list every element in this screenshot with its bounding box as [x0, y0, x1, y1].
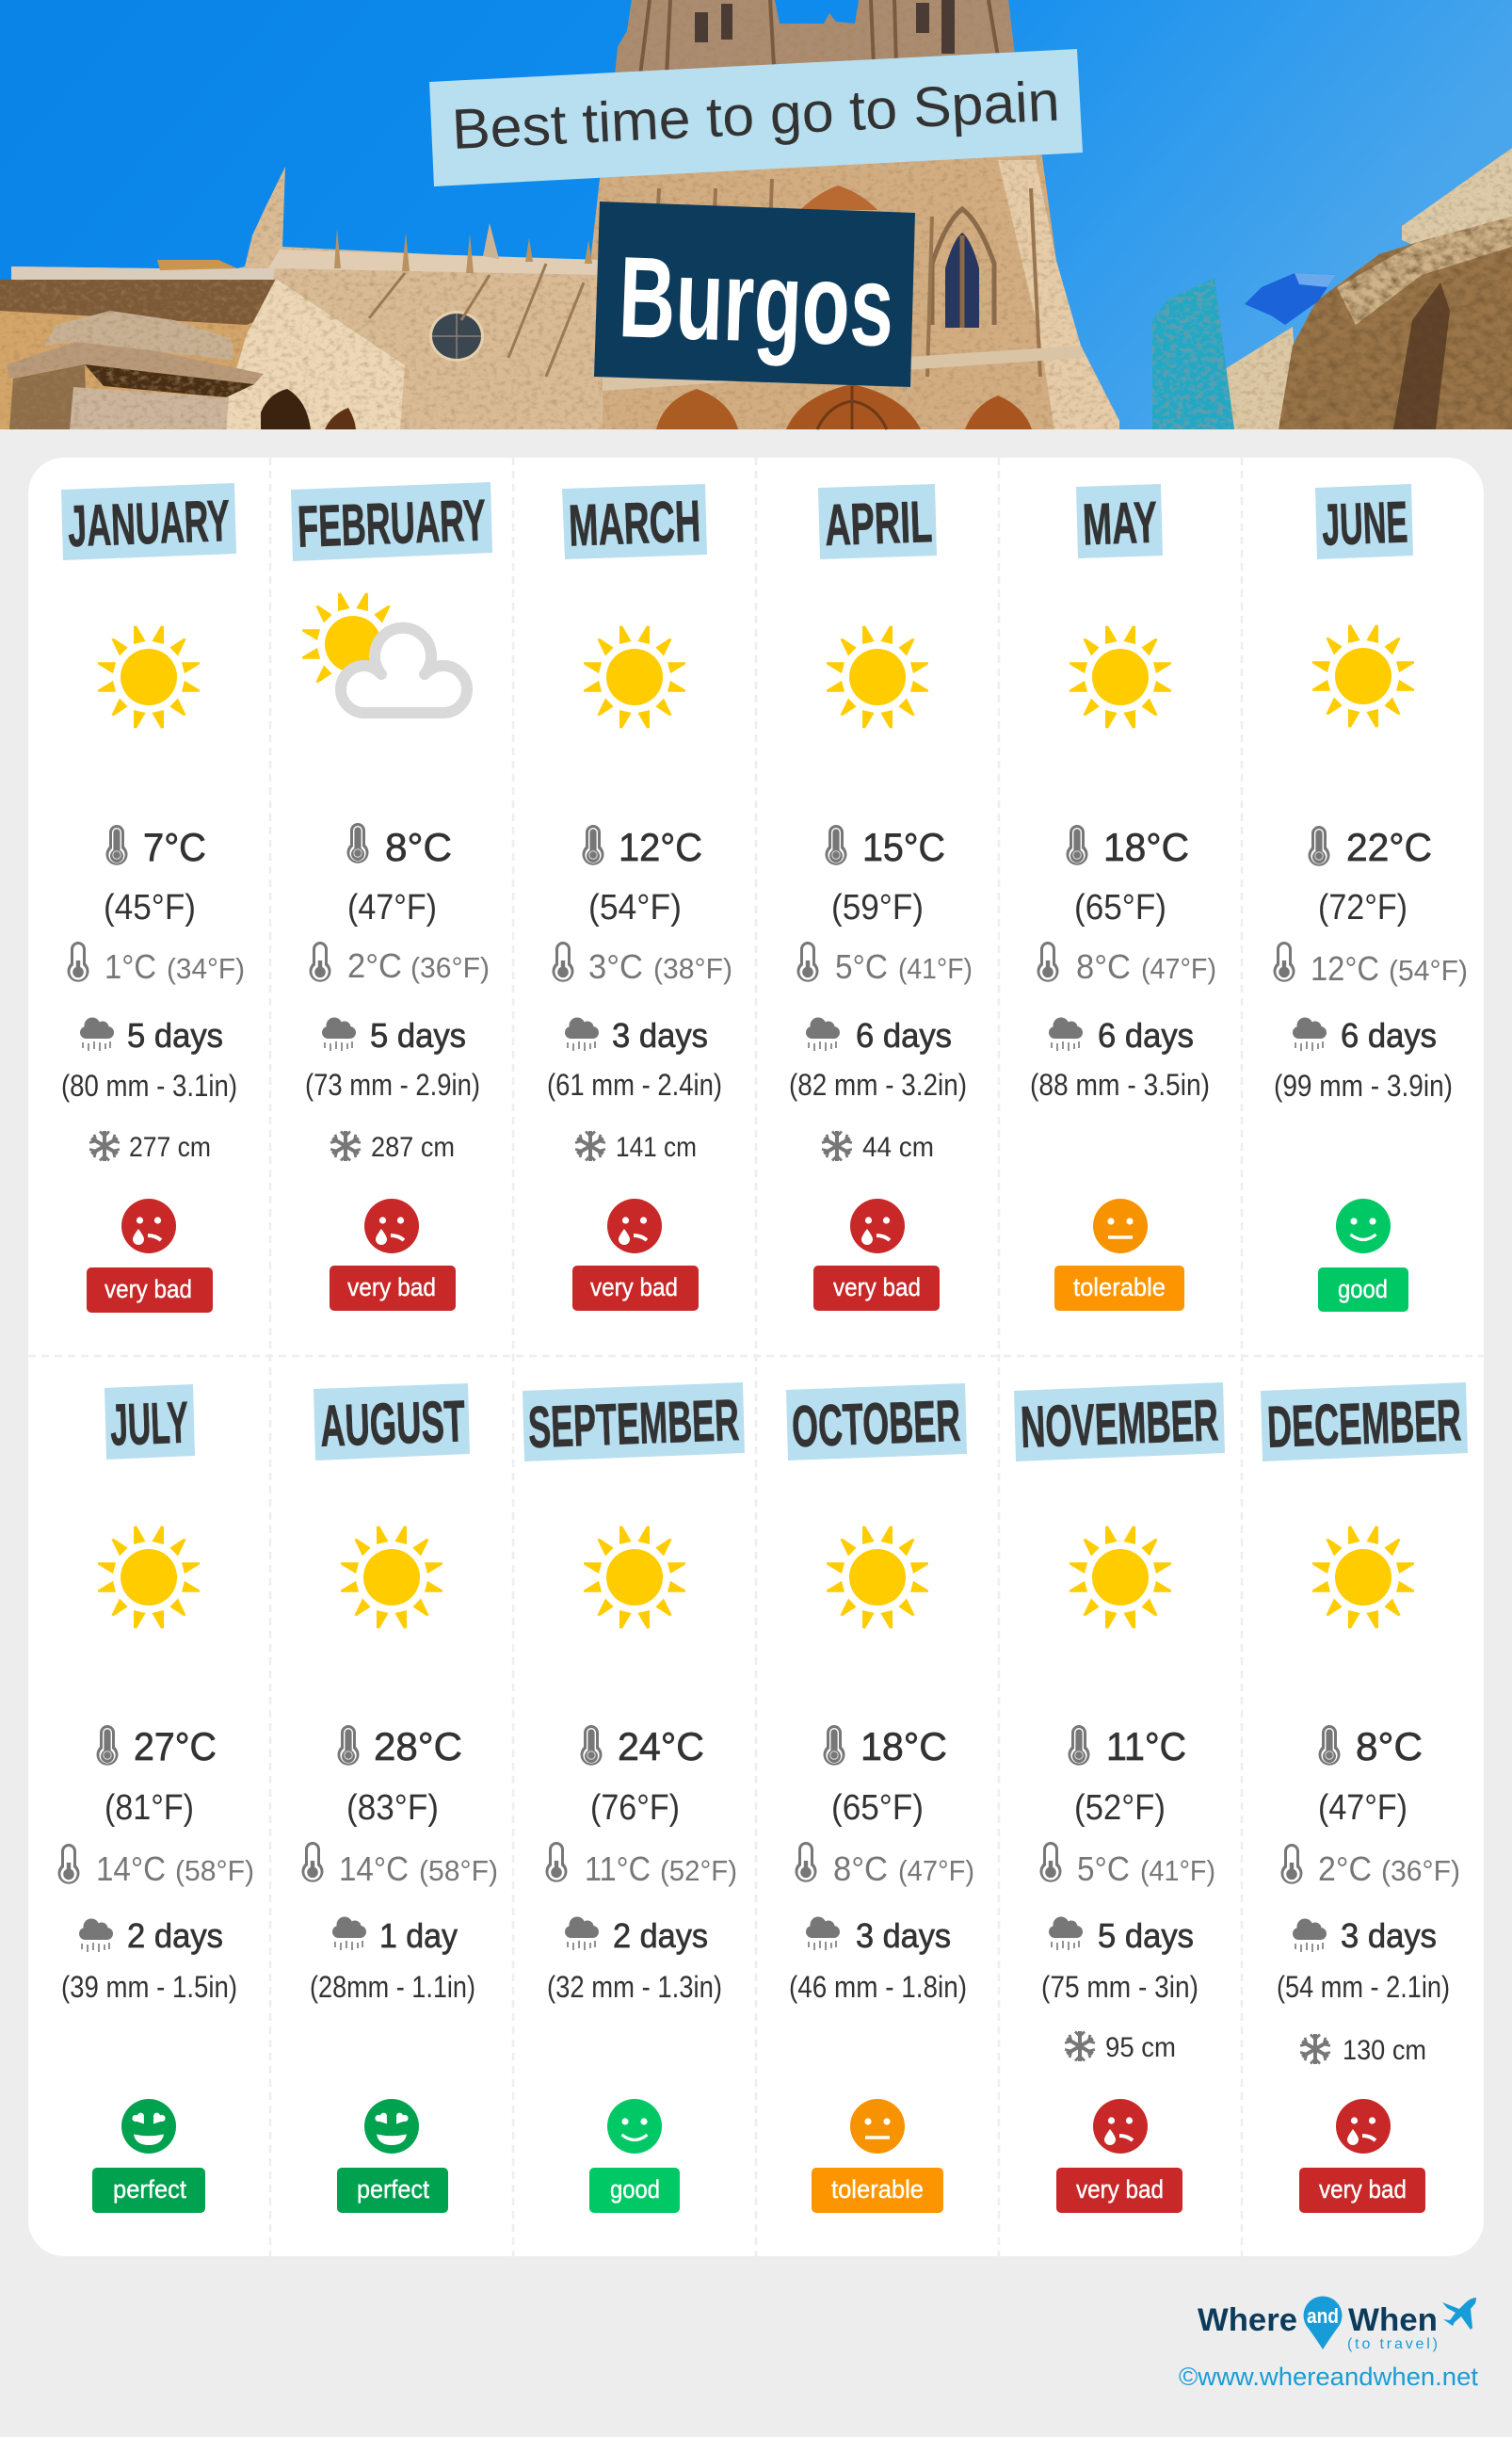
month label: APRIL [824, 490, 933, 558]
logo: Where and When: When [1348, 2302, 1438, 2338]
icon: rain cloud [565, 1017, 599, 1051]
rainy days: 2 days [613, 1916, 708, 1955]
low temperature F: (41°F) [1140, 1854, 1215, 1887]
high temperature C: 18°C [861, 1724, 947, 1768]
rainy days: 5 days [1098, 1916, 1194, 1955]
panel: October [786, 1383, 974, 2213]
rating pill [92, 2168, 205, 2213]
high temperature C: 15°C [862, 825, 945, 869]
icon: thermometer low [309, 942, 331, 982]
icon: rain cloud [1293, 1919, 1327, 1952]
icon: thermometer low [1273, 942, 1295, 982]
icon: sun [341, 1525, 442, 1629]
low temperature F: (52°F) [660, 1854, 737, 1887]
low temperature F: (34°F) [167, 952, 245, 985]
snowfall: 44 cm [862, 1132, 934, 1163]
rainy days: 6 days [856, 1016, 952, 1055]
low temperature F: (36°F) [410, 951, 490, 984]
rating pill [1299, 2168, 1425, 2213]
rating pill: tolerable [1073, 1273, 1166, 1301]
icon: snowflake [89, 1131, 120, 1161]
icon: snowflake [575, 1131, 605, 1161]
high temperature F: (47°F) [1318, 1788, 1407, 1828]
icon: rain cloud [322, 1017, 356, 1051]
low temperature C: 8°C [1076, 947, 1131, 986]
rating pill [1056, 2168, 1182, 2213]
rating pill [337, 2168, 448, 2213]
icon: sun behind cloud [302, 593, 467, 713]
header photo: Burgos cathedral [0, 0, 1512, 429]
rainy days: 5 days [127, 1016, 223, 1055]
high temperature F: (47°F) [347, 888, 437, 928]
high temperature C: 22°C [1346, 825, 1432, 869]
high temperature C: 11°C [1106, 1724, 1186, 1768]
rainy days: 6 days [1098, 1016, 1194, 1055]
logo: Where and When [1198, 2297, 1476, 2352]
month label: JUNE [1321, 490, 1408, 558]
icon: snowflake [1300, 2034, 1330, 2064]
low temperature F: (47°F) [1141, 952, 1216, 985]
rating pill: very bad [1319, 2175, 1407, 2203]
white card panel [28, 458, 1484, 2256]
low temperature C: 1°C [105, 947, 156, 986]
high temperature F: (72°F) [1318, 888, 1407, 928]
high temperature F: (52°F) [1074, 1788, 1166, 1828]
month label [1076, 484, 1163, 558]
month label: OCTOBER [791, 1389, 961, 1460]
rating pill: very bad [347, 1273, 436, 1301]
snowfall: 130 cm [1343, 2035, 1426, 2066]
icon: sun [98, 625, 200, 729]
high temperature C: 24°C [618, 1724, 704, 1768]
icon: neutral face [1093, 1199, 1148, 1253]
rating pill: tolerable [831, 2175, 924, 2203]
copyright url: ©www.whereandwhen.net [1179, 2363, 1478, 2391]
low temperature C: 5°C [835, 947, 888, 986]
low temperature F: (58°F) [175, 1854, 254, 1887]
month label [61, 483, 236, 560]
icon: thermometer low [795, 1842, 817, 1882]
icon: thermometer low [546, 1842, 567, 1882]
icon: thermometer high [96, 1725, 119, 1766]
low temperature F: (54°F) [1389, 954, 1468, 987]
panel: November [1014, 1382, 1225, 2213]
icon: map pin [1304, 2297, 1343, 2349]
month label: FEBRUARY [297, 488, 487, 560]
low temperature F: (36°F) [1381, 1854, 1460, 1887]
icon: sun [1312, 625, 1414, 727]
icon: thermometer high [823, 1725, 845, 1766]
icon: sun [1070, 1525, 1171, 1629]
month label: SEPTEMBER [527, 1388, 740, 1461]
low temperature F: (41°F) [898, 952, 973, 985]
month label: JULY [109, 1391, 189, 1459]
rating pill [589, 2168, 680, 2213]
icon: smiling face [607, 2099, 662, 2154]
low temperature C: 2°C [1318, 1849, 1372, 1888]
icon: smiling face [1336, 1199, 1391, 1253]
high temperature C: 8°C [385, 825, 452, 869]
icon: sun [584, 1525, 685, 1629]
low temperature C: 14°C [96, 1849, 166, 1888]
panel: March [547, 484, 732, 1311]
rating pill [572, 1266, 699, 1311]
icon: sun [827, 625, 928, 729]
rating pill [87, 1267, 213, 1313]
icon: crying face [121, 1199, 176, 1253]
panel: February [291, 482, 492, 1311]
icon: thermometer high [1309, 826, 1329, 866]
high temperature C: 27°C [134, 1724, 217, 1768]
rainfall: (82 mm - 3.2in) [789, 1068, 967, 1102]
month label: AUGUST [319, 1389, 466, 1460]
icon: snowflake [330, 1131, 361, 1161]
icon: rain cloud [806, 1017, 840, 1051]
rainfall: (75 mm - 3in) [1041, 1970, 1198, 2004]
low temperature C: 12°C [1311, 949, 1379, 988]
icon: thermometer high [580, 1725, 603, 1766]
rainfall: (32 mm - 1.3in) [547, 1970, 722, 2004]
icon: thermometer low [796, 942, 819, 982]
icon: rain cloud [80, 1017, 114, 1051]
high temperature C: 18°C [1103, 825, 1189, 869]
high temperature C: 7°C [143, 825, 206, 869]
icon: thermometer high [1068, 1725, 1090, 1766]
rating pill: good [1338, 1275, 1388, 1303]
icon: crying face [1336, 2099, 1391, 2154]
rainy days: 3 days [612, 1016, 708, 1055]
rainfall: (61 mm - 2.4in) [547, 1068, 722, 1102]
high temperature C: 8°C [1356, 1724, 1423, 1768]
icon: thermometer high [337, 1725, 360, 1766]
panel: July [58, 1384, 254, 2213]
rainy days: 3 days [1341, 1916, 1437, 1955]
icon: sun [98, 1525, 200, 1629]
high temperature F: (45°F) [104, 888, 196, 928]
rainy days: 2 days [127, 1916, 223, 1955]
icon: crying face [364, 1199, 419, 1253]
low temperature C: 2°C [347, 946, 402, 985]
icon: thermometer high [825, 825, 847, 865]
low temperature C: 11°C [585, 1849, 651, 1888]
icon: thermometer high [346, 823, 369, 863]
panel: December [1261, 1382, 1468, 2213]
icon: sun [1312, 1525, 1414, 1629]
rating pill [812, 2168, 943, 2213]
rating pill: perfect [113, 2175, 186, 2203]
rainfall: (80 mm - 3.1in) [61, 1069, 237, 1103]
icon: thermometer high [582, 825, 604, 865]
month label [314, 1383, 470, 1461]
month label [818, 484, 937, 559]
month label: MARCH [568, 489, 701, 559]
low temperature C: 5°C [1077, 1849, 1130, 1888]
panel: June [1273, 484, 1468, 1312]
rainy days: 6 days [1341, 1016, 1437, 1055]
icon: sun [584, 625, 685, 729]
snowfall: 287 cm [371, 1132, 455, 1163]
high temperature C: 28°C [374, 1724, 462, 1768]
icon: thermometer low [58, 1844, 79, 1884]
rainfall: (99 mm - 3.9in) [1274, 1069, 1453, 1103]
panel: May [1030, 484, 1216, 1311]
rainy days: 1 day [379, 1916, 458, 1955]
rainfall: (28mm - 1.1in) [310, 1970, 475, 2004]
low temperature C: 3°C [588, 947, 643, 986]
rating pill [1318, 1267, 1408, 1312]
icon: sun [827, 1525, 928, 1629]
month label [105, 1384, 195, 1460]
icon: crying face [1093, 2099, 1148, 2154]
rating pill: very bad [833, 1273, 921, 1301]
icon: airplane [1442, 2298, 1476, 2330]
month label [291, 482, 492, 561]
icon: heart-eyes face [364, 2099, 419, 2154]
month label: JANUARY [67, 489, 231, 559]
rainfall: (73 mm - 2.9in) [305, 1068, 480, 1102]
rainfall: (46 mm - 1.8in) [789, 1970, 967, 2004]
month label [562, 484, 707, 559]
rating pill [330, 1266, 456, 1311]
rating pill [813, 1266, 940, 1311]
icon: heart-eyes face [121, 2099, 176, 2154]
icon: thermometer high [1318, 1725, 1341, 1766]
icon: sun [1070, 625, 1171, 729]
city name plate: Burgos [617, 233, 896, 370]
icon: rain cloud [806, 1917, 840, 1950]
icon: snowflake [1065, 2031, 1095, 2061]
rainfall: (54 mm - 2.1in) [1277, 1970, 1450, 2004]
high temperature F: (83°F) [346, 1788, 439, 1828]
icon: thermometer low [1280, 1844, 1303, 1884]
rating pill: good [610, 2175, 660, 2203]
logo: Where and When: (to travel) [1347, 2336, 1438, 2352]
high temperature F: (76°F) [590, 1788, 680, 1828]
icon: rain cloud [79, 1919, 113, 1952]
low temperature F: (38°F) [653, 952, 732, 985]
snowfall: 277 cm [129, 1132, 211, 1163]
icon: thermometer high [105, 825, 128, 865]
icon: rain cloud [1049, 1917, 1083, 1950]
snowfall: 95 cm [1105, 2032, 1176, 2063]
rating pill: perfect [357, 2175, 429, 2203]
icon: thermometer low [1037, 942, 1058, 982]
high temperature F: (59°F) [831, 888, 924, 928]
rating pill: very bad [1076, 2175, 1164, 2203]
rating pill: very bad [105, 1275, 192, 1303]
title ribbon: Best time to go to Spain [450, 70, 1061, 161]
high temperature F: (65°F) [831, 1788, 924, 1828]
panel: April [789, 484, 973, 1311]
month label: NOVEMBER [1020, 1388, 1219, 1461]
rainfall: (88 mm - 3.5in) [1030, 1068, 1210, 1102]
month label [1014, 1382, 1225, 1461]
icon: snowflake [822, 1131, 852, 1161]
low temperature C: 14°C [339, 1849, 409, 1888]
icon: rain cloud [565, 1917, 599, 1950]
icon: thermometer low [301, 1842, 324, 1882]
city name plate [594, 202, 915, 387]
month label [523, 1382, 745, 1461]
rating pill [1054, 1266, 1184, 1311]
logo: Where and When: and [1307, 2304, 1339, 2328]
icon: thermometer low [552, 942, 574, 982]
high temperature C: 12°C [619, 825, 702, 869]
icon: thermometer high [1066, 825, 1088, 865]
month label: MAY [1082, 491, 1158, 557]
panel: January [61, 483, 245, 1313]
month label [1315, 484, 1413, 559]
low temperature F: (47°F) [898, 1854, 974, 1887]
icon: thermometer low [1039, 1842, 1062, 1882]
panel: September [523, 1382, 745, 2213]
logo: Where and When: Where [1198, 2302, 1297, 2338]
rating pill: very bad [590, 1273, 678, 1301]
icon: neutral face [850, 2099, 905, 2154]
icon: rain cloud [332, 1917, 366, 1950]
high temperature F: (65°F) [1074, 888, 1166, 928]
low temperature F: (58°F) [419, 1854, 498, 1887]
rainy days: 5 days [370, 1016, 466, 1055]
icon: thermometer low [68, 942, 88, 982]
icon: crying face [607, 1199, 662, 1253]
month label [786, 1383, 967, 1461]
icon: crying face [850, 1199, 905, 1253]
icon: rain cloud [1293, 1017, 1327, 1051]
rainfall: (39 mm - 1.5in) [61, 1970, 237, 2004]
low temperature C: 8°C [833, 1849, 888, 1888]
high temperature F: (81°F) [105, 1788, 194, 1828]
rainy days: 3 days [856, 1916, 951, 1955]
title ribbon [429, 49, 1083, 186]
panel: August [301, 1383, 498, 2213]
snowfall: 141 cm [616, 1132, 697, 1163]
high temperature F: (54°F) [588, 888, 682, 928]
icon: rain cloud [1049, 1017, 1083, 1051]
